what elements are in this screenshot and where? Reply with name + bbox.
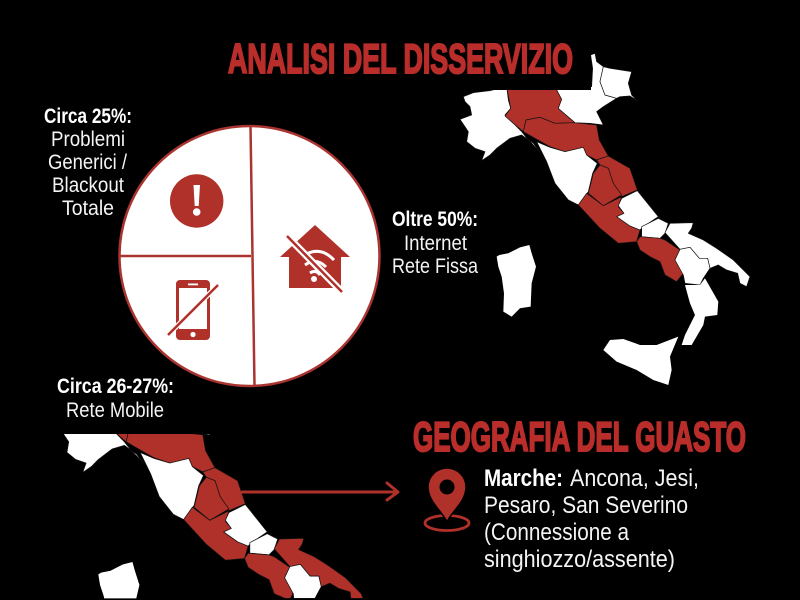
- arrow: from Marche to details: [242, 483, 398, 500]
- label: generic problems: Problemi: [51, 128, 125, 151]
- label: fixed internet: Internet: [404, 232, 467, 255]
- text: Marche details: (Connessione a: [484, 519, 630, 546]
- label: mobile network: Rete Mobile: [66, 399, 164, 422]
- icon: mobile phone crossed out: [168, 280, 218, 340]
- map: Italy with affected regions (top): [460, 53, 750, 385]
- label: mobile network: Circa 26-27%:: [57, 375, 174, 398]
- text: Marche details: [484, 465, 699, 573]
- text: Marche details: Ancona, Jesi,: [570, 465, 699, 492]
- text: Marche details: singhiozzo/assente): [484, 546, 675, 573]
- label: mobile network: [57, 375, 174, 422]
- label: generic problems: Circa 25%:: [44, 105, 132, 128]
- label: fixed internet: Rete Fissa: [392, 255, 478, 278]
- icon: alert: [170, 174, 223, 228]
- map: Italy detail with affected regions (bottom): [63, 434, 364, 598]
- icon: location pin: [425, 468, 469, 530]
- text: Marche details: Pesaro, San Severino: [484, 492, 688, 519]
- title: analisi del disservizio: ANALISI DEL DISSERVIZIO: [228, 35, 573, 82]
- label: generic problems: [44, 105, 132, 220]
- label: generic problems: Totale: [62, 197, 114, 220]
- label: generic problems: Generici /: [48, 151, 127, 174]
- text: Marche details: Marche:: [484, 465, 563, 492]
- label: fixed internet: Oltre 50%:: [392, 208, 478, 231]
- icon: home wifi crossed out: [280, 225, 350, 292]
- label: generic problems: Blackout: [52, 174, 124, 197]
- label: fixed internet: [392, 208, 478, 278]
- pie chart: share of reported problems: [120, 126, 380, 386]
